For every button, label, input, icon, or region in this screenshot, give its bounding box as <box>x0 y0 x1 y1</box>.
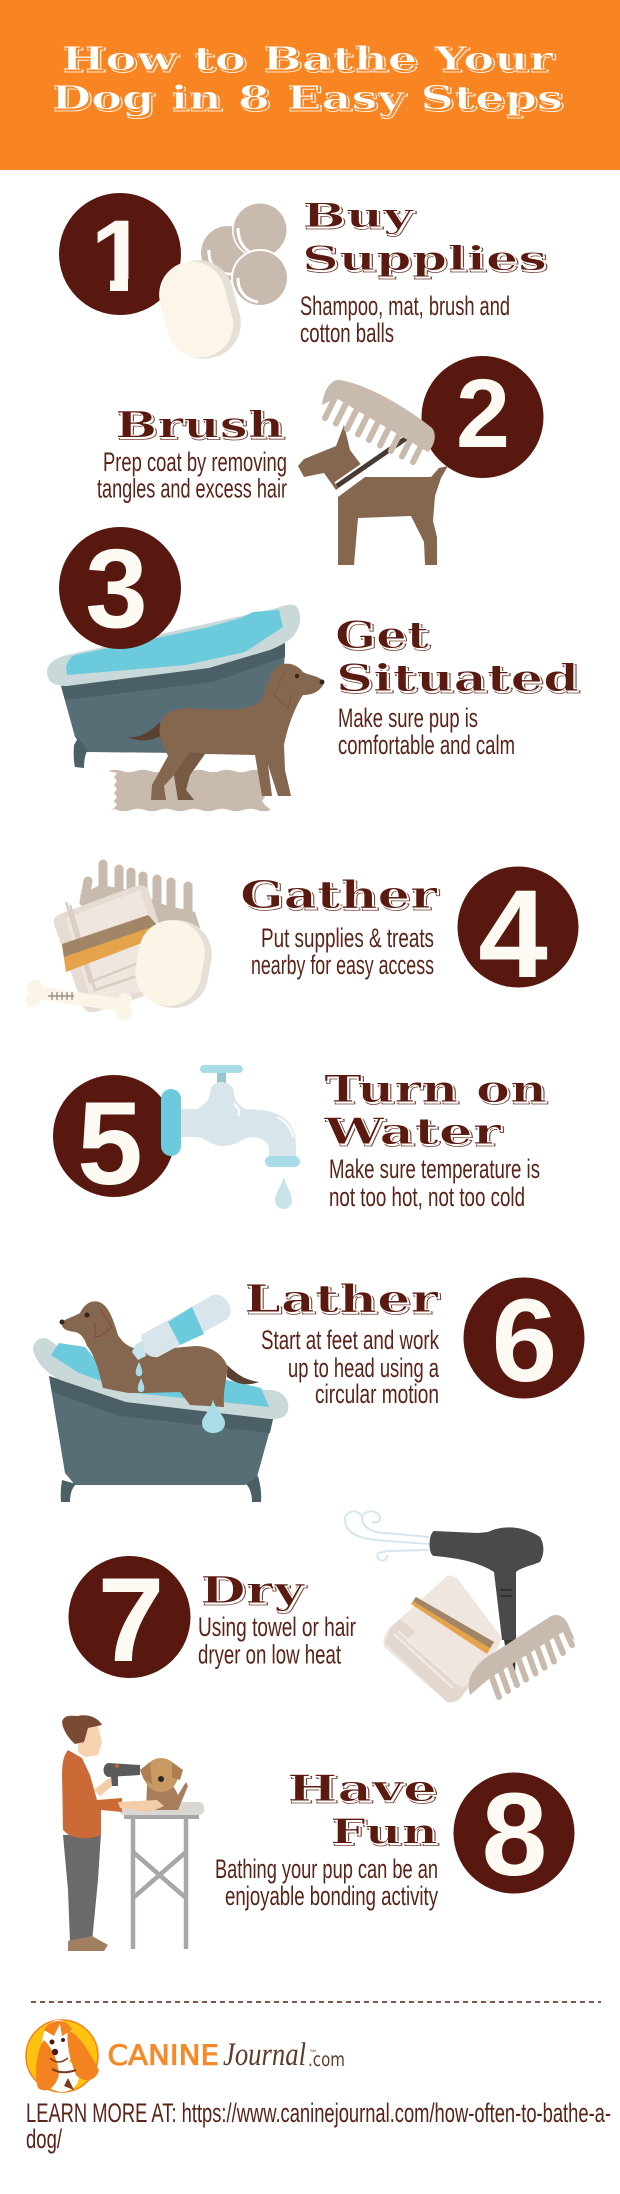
heading: buy supplies: Supplies <box>302 239 547 279</box>
text: step 6 description: Start at feet and work <box>261 1325 439 1355</box>
heading: get situated: Get <box>337 615 431 659</box>
heading: have fun: Have <box>289 1770 439 1812</box>
text: step 2 description: tangles and excess hair <box>97 474 287 504</box>
number badge 6: 6 <box>492 1275 557 1407</box>
number badge 8: 8 <box>482 1769 547 1901</box>
icon: hair dryer <box>430 1527 543 1678</box>
icon: bath mat <box>108 770 271 811</box>
title: How to Bathe Your <box>63 41 556 80</box>
heading: dry: Dry <box>200 1568 306 1612</box>
number badge 5: 5 <box>77 1078 143 1210</box>
wordmark: CANINE <box>108 2038 219 2072</box>
heading: get situated: Situated <box>336 656 579 700</box>
number badge 2 <box>422 356 544 478</box>
icon: dog with collar <box>298 425 448 565</box>
icon: bathtub with dog <box>33 1301 288 1502</box>
text: step 1 description <box>300 291 510 348</box>
text: step 4 description: nearby for easy access <box>251 950 434 980</box>
step 2 panel: brush <box>97 356 544 565</box>
footer logo: canine journal <box>26 2020 345 2092</box>
icon: big water drop <box>202 1400 225 1433</box>
icon: rolled towel <box>383 1575 502 1702</box>
icon: air swirls <box>345 1511 429 1561</box>
heading: have fun: Fun <box>330 1812 438 1852</box>
text: step 2 description <box>97 447 287 504</box>
wordmark <box>108 2037 345 2073</box>
heading: dry <box>200 1568 308 1614</box>
title: Dog in 8 Easy Steps <box>53 80 565 119</box>
icon: basset hound badge <box>26 2020 99 2092</box>
heading: lather <box>244 1276 441 1323</box>
icon: cotton balls <box>201 202 289 307</box>
text: step 5 description: not too hot, not too cold <box>329 1182 525 1212</box>
heading: turn on water: Water <box>325 1113 505 1155</box>
step 3 panel: get situated <box>47 526 581 811</box>
number badge 4: 4 <box>478 865 548 1004</box>
heading: buy supplies: Buy <box>302 196 415 236</box>
icon: bathtub <box>47 605 300 768</box>
footer source link text <box>26 2098 611 2154</box>
text: step 3 description <box>338 703 515 760</box>
heading: turn on water: Turn on <box>324 1067 547 1111</box>
text: step 8 description: enjoyable bonding activity <box>225 1881 438 1911</box>
text: step 1 description: Shampoo, mat, brush and <box>300 291 510 321</box>
header banner <box>0 0 620 170</box>
text: step 6 description <box>261 1325 440 1409</box>
groomer <box>62 1715 164 1951</box>
heading: turn on water: Water <box>323 1111 503 1153</box>
title: Dog in 8 Easy Steps <box>51 78 563 117</box>
step 7 panel: dry <box>68 1511 575 1702</box>
heading: dry: Dry <box>202 1570 308 1614</box>
heading: turn on water: Turn on <box>326 1069 549 1113</box>
heading: have fun: Have <box>287 1768 437 1810</box>
icon: sponge <box>130 915 217 1013</box>
heading: lather: Lather <box>244 1276 439 1321</box>
footer source link text: dog/ <box>26 2124 62 2154</box>
heading: get situated: Get <box>335 613 429 657</box>
text: step 7 description: Using towel or hair <box>198 1612 356 1642</box>
icon: towel <box>54 885 178 1012</box>
wordmark: SM <box>310 2048 316 2053</box>
step 5 panel: turn on water <box>53 1065 549 1212</box>
text: step 3 description: Make sure pup is <box>338 703 478 733</box>
number badge 5 <box>53 1075 175 1210</box>
text: step 3 description: comfortable and calm <box>338 730 515 760</box>
wordmark: .com <box>308 2049 345 2071</box>
heading: brush <box>115 404 286 448</box>
icon: comb <box>469 1615 575 1697</box>
handheld dryer <box>104 1763 140 1786</box>
icon: comb <box>322 380 435 462</box>
text: step 5 description <box>329 1154 540 1212</box>
icon: groomer with dog on table <box>62 1715 204 1951</box>
title: How to Bathe Your <box>61 39 554 78</box>
icon: soap <box>152 252 249 367</box>
heading: buy supplies: Supplies <box>304 241 549 281</box>
heading: gather: Gather <box>242 874 440 919</box>
text: step 7 description <box>198 1612 356 1670</box>
number badge 6 <box>464 1275 584 1407</box>
text: step 7 description: dryer on low heat <box>198 1640 341 1670</box>
heading: buy supplies: Buy <box>304 198 417 238</box>
heading: gather <box>240 872 440 919</box>
icon: standing dog <box>128 664 324 800</box>
text: step 8 description: Bathing your pup can be an <box>215 1854 438 1884</box>
number badge 1 <box>59 193 181 315</box>
number badge 2: 2 <box>456 359 510 468</box>
title <box>51 39 565 119</box>
heading: have fun <box>287 1768 440 1854</box>
heading: get situated <box>335 613 581 702</box>
step 8 panel: have fun <box>62 1715 574 1951</box>
number badge 4 <box>458 865 578 1004</box>
number badge 7: 7 <box>98 1553 164 1687</box>
icon: shampoo bottle <box>132 1295 231 1392</box>
text: step 2 description: Prep coat by removing <box>103 447 287 477</box>
heading: brush: Brush <box>115 404 284 446</box>
text: step 6 description: up to head using a <box>288 1353 440 1383</box>
text: step 8 description <box>215 1854 438 1911</box>
table <box>119 1802 204 1949</box>
icon: bone <box>26 980 132 1020</box>
text: step 1 description: cotton balls <box>300 318 394 348</box>
step 4 panel: gather <box>26 864 578 1020</box>
icon: comb behind towel <box>80 864 200 935</box>
heading: brush: Brush <box>117 406 286 448</box>
heading: gather: Gather <box>240 872 438 917</box>
text: step 4 description <box>251 923 434 980</box>
number badge 1: 1 <box>91 199 147 313</box>
heading: lather: Lather <box>246 1278 441 1323</box>
heading: buy supplies <box>302 196 549 281</box>
heading: turn on water <box>323 1067 549 1155</box>
text: step 4 description: Put supplies & treats <box>261 923 434 953</box>
small dog <box>140 1758 188 1810</box>
step 1 panel: buy supplies <box>59 193 549 367</box>
step 6 panel: lather <box>33 1275 584 1502</box>
heading: get situated: Situated <box>338 658 581 702</box>
number badge 3: 3 <box>85 526 148 651</box>
number badge 3 <box>59 526 181 651</box>
number badge 8 <box>454 1769 574 1901</box>
icon: faucet <box>161 1065 300 1209</box>
number badge 7 <box>68 1553 190 1687</box>
wordmark: Journal <box>223 2037 306 2073</box>
heading: have fun: Fun <box>332 1814 440 1854</box>
text: step 6 description: circular motion <box>315 1379 439 1409</box>
